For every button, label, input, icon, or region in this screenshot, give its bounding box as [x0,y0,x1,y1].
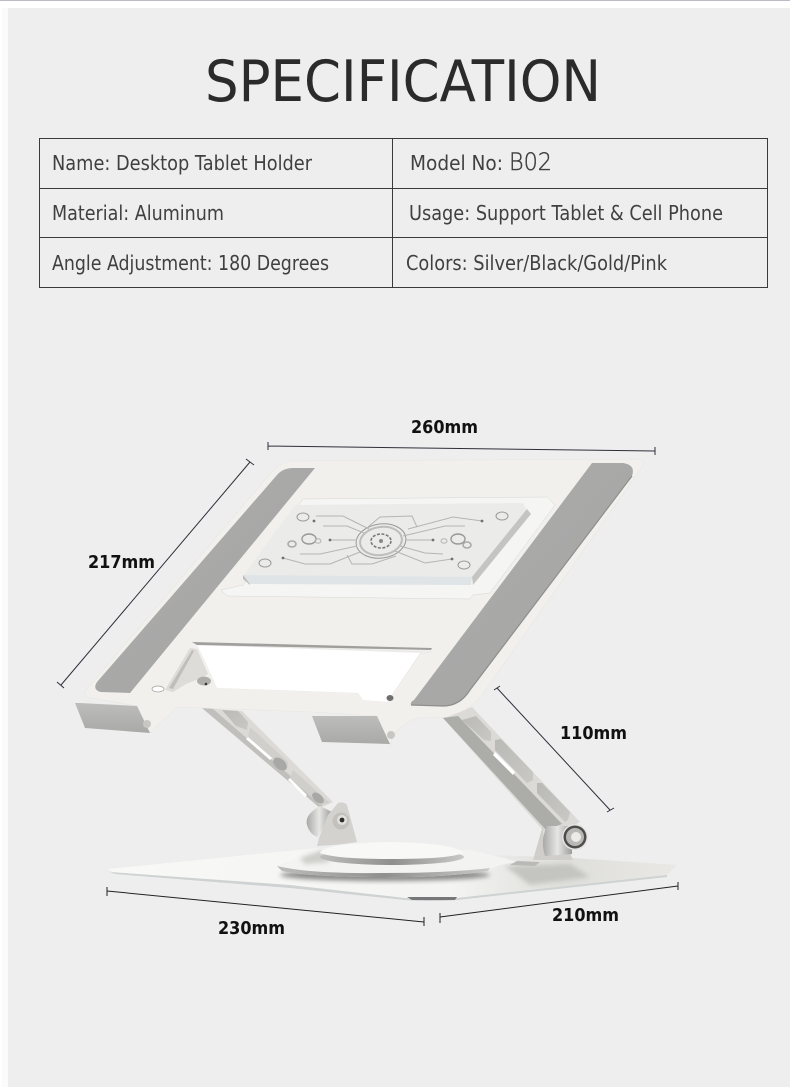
right hinge [533,824,588,860]
row 1 right: model number: B02 [509,148,552,176]
title: SPECIFICATION [205,49,601,115]
row 2 right: usage: Usage: Support Tablet & Cell Phone [409,201,723,225]
left arm slot 1 [222,710,248,730]
dimension: 110mm: 110mm [560,723,627,744]
row 1 left: name: Name: Desktop Tablet Holder [52,151,313,175]
right arm slot 2 [495,739,533,783]
middle front tab [312,716,395,744]
right rubber pad [411,463,633,706]
turntable lower ring [277,850,540,881]
left arm side face [202,708,323,808]
base plate [108,848,677,901]
circuit pattern [259,512,508,569]
right nodes [496,512,508,520]
dimension: 210mm: 210mm [552,905,619,926]
dimension: 260mm [268,417,655,455]
left traces [316,516,369,529]
left hinge [307,802,357,846]
left arm slot 3 [290,770,330,805]
plate holes [152,686,394,701]
dimension: 230mm [107,887,424,939]
row 3 right: colors: Colors: Silver/Black/Gold/Pink [406,251,667,275]
row 1 right: model number: Model No: [410,151,503,175]
dimension: 210mm [440,882,678,926]
left front tab [75,703,151,733]
window opening [197,645,420,702]
trace end dots [282,520,483,560]
right arm slot 1 [462,716,491,741]
dimension: 217mm [57,459,254,688]
dimension: 230mm: 230mm [218,918,285,939]
circuit card [243,503,531,585]
right arm slot 3 [537,783,570,822]
row 2 left: material: Material: Aluminum [52,201,224,225]
row 3 left: angle adjustment: Angle Adjustment: 180 Degrees [52,251,329,275]
specification table [40,138,768,288]
dimension: 260mm: 260mm [411,417,478,438]
right traces [408,517,482,529]
top plate [85,459,643,746]
dimension: 217mm: 217mm [88,552,155,573]
left arm [202,708,333,808]
right arm side face [443,716,562,830]
window upper edge [192,642,432,650]
circuit hexagon frame [368,516,417,527]
table grid [40,138,768,288]
product illustration: tablet stand [75,459,677,901]
recessed lighter plate [221,497,555,599]
circuit hub [354,521,408,561]
left arm body [202,708,333,808]
left arm slot 2 [248,727,288,770]
row 1 right: model number [410,148,552,176]
dimension: 110mm [494,686,627,812]
left nodes [297,513,309,521]
right arm top face [443,707,580,838]
left rubber pad [95,468,315,693]
right arm [443,707,580,838]
inner bracket seen through the window [165,648,211,692]
turntable top disc [320,842,464,865]
